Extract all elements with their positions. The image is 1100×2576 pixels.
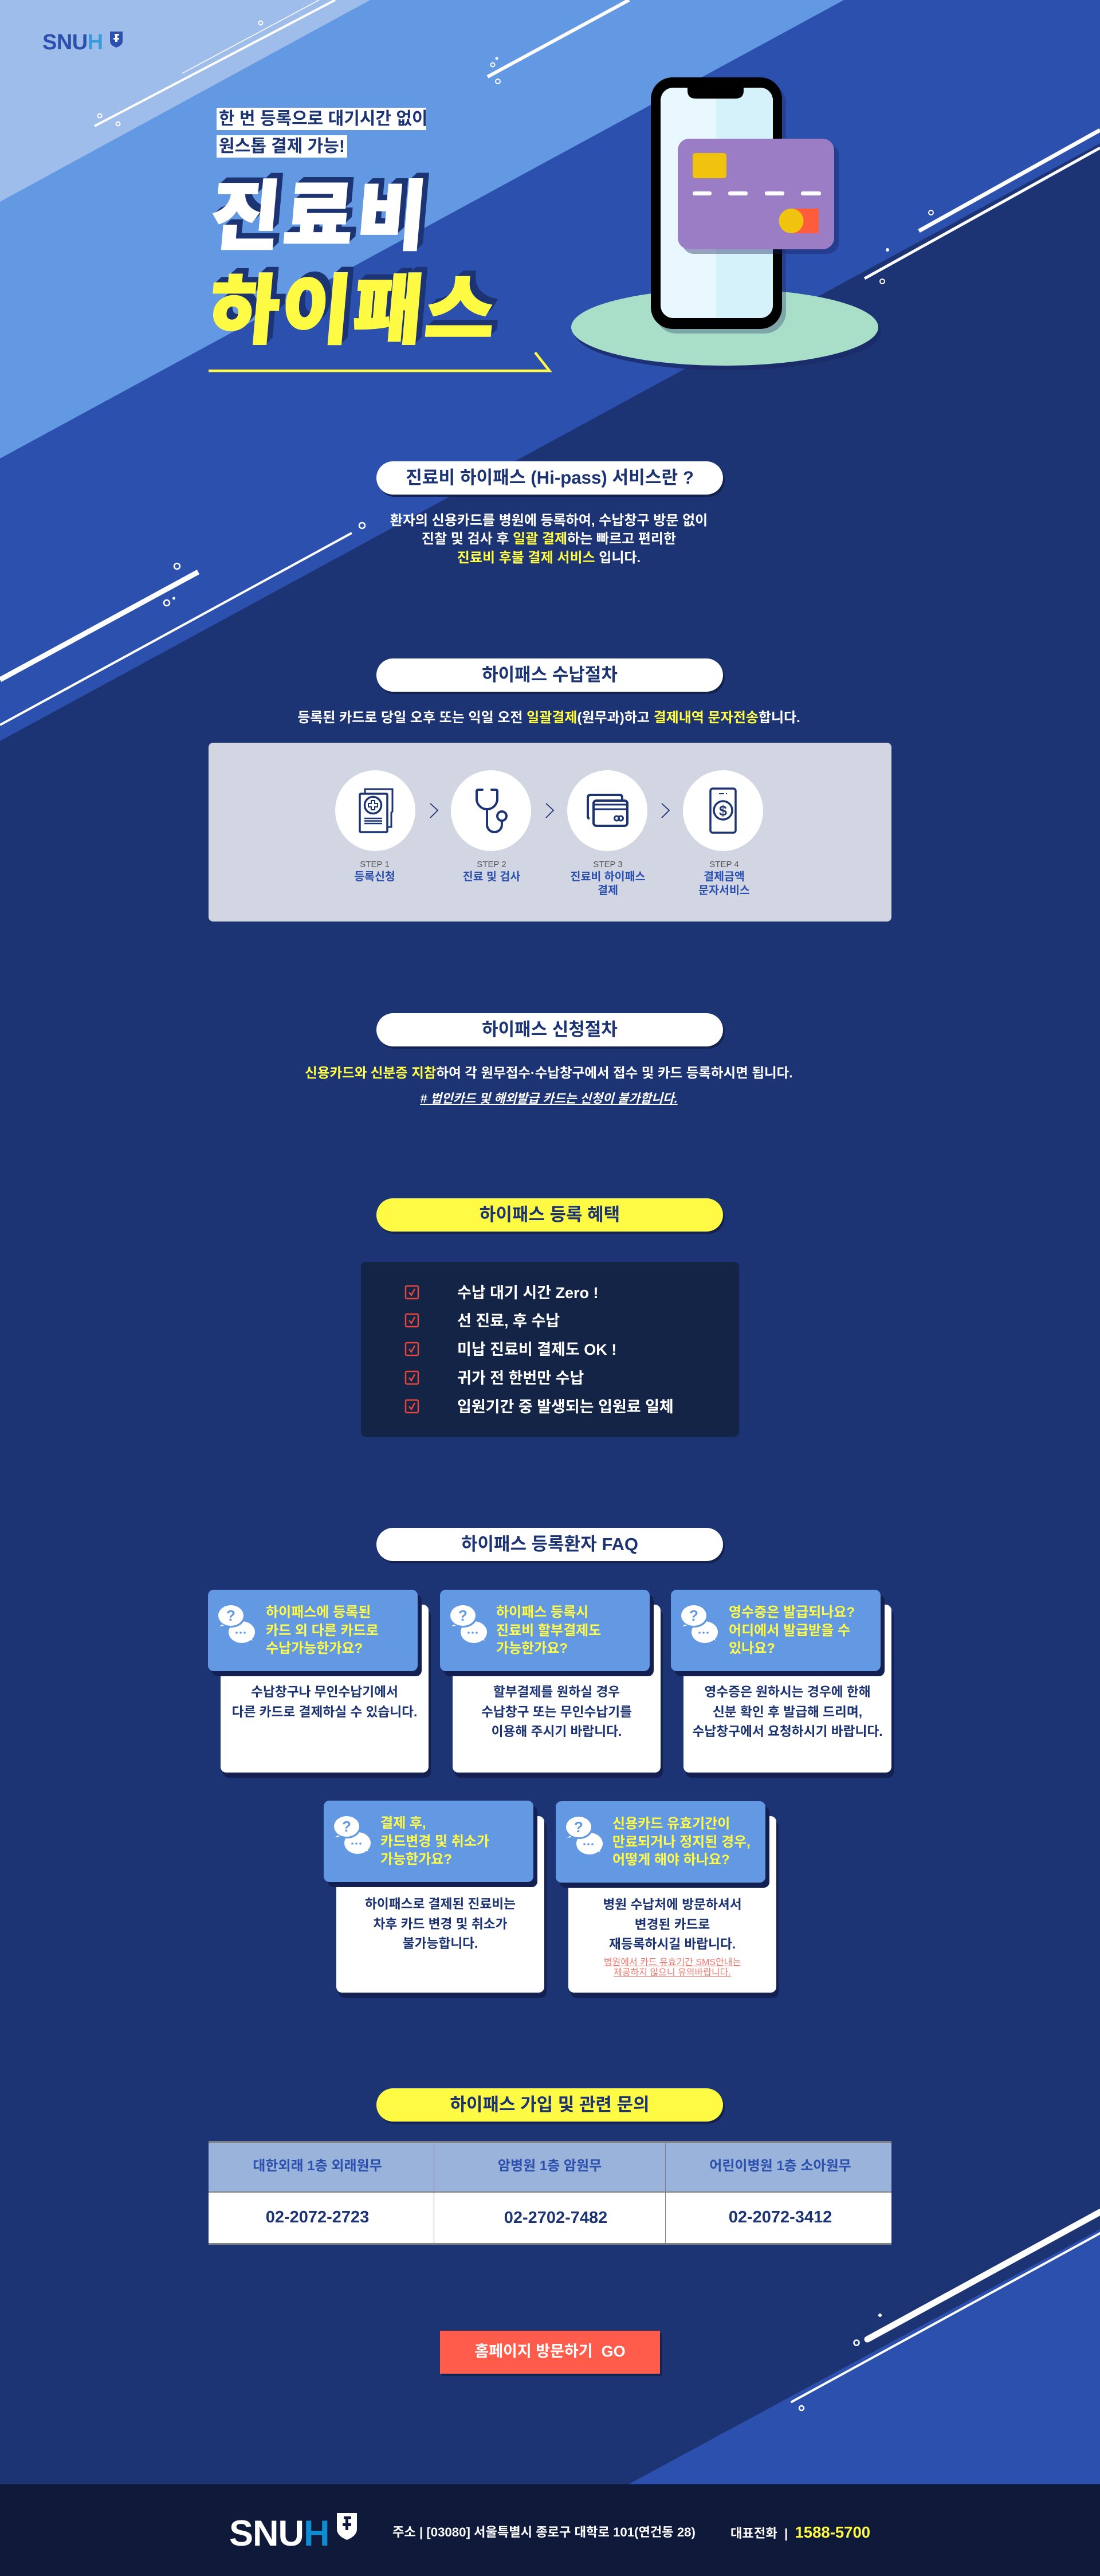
FAQ card 5: 재등록하시길 바랍니다. <box>609 1936 736 1951</box>
icon: speech bubbles <box>681 1605 718 1643</box>
heading: what is hi-pass <box>376 461 723 495</box>
FAQ card 1 <box>208 1590 431 1778</box>
benefit checkboxes <box>404 1285 419 1413</box>
heading: what is hi-pass: 진료비 하이패스 (Hi-pass) 서비스란 ? <box>406 468 694 488</box>
icon: speech bubbles <box>566 1817 603 1854</box>
red note: 병원에서 카드 유효기간 SMS안내는 <box>604 1958 741 1967</box>
benefit 4: 귀가 전 한번만 수납 <box>457 1370 584 1387</box>
FAQ card 2: 진료비 할부결제도 <box>496 1623 601 1638</box>
text: service description: 진료비 후불 결제 서비스 입니다. <box>457 550 641 566</box>
footer <box>0 2484 1100 2576</box>
icon: medical document <box>360 789 392 832</box>
heading: FAQ <box>376 1528 723 1561</box>
icon: speech bubbles <box>334 1816 371 1854</box>
step 1 label <box>354 860 395 883</box>
platform ellipse <box>571 289 881 370</box>
step 2 label: 진료 및 검사 <box>463 871 520 883</box>
FAQ card 1: 카드 외 다른 카드로 <box>266 1623 379 1638</box>
step 3 label <box>571 860 645 896</box>
panel: benefits <box>361 1262 739 1437</box>
icon: speech bubbles: ? <box>458 1607 467 1624</box>
FAQ card 5: 변경된 카드로 <box>635 1916 710 1931</box>
heading: payment procedure <box>376 658 723 692</box>
FAQ card 5: 병원 수납처에 방문하셔서 <box>603 1897 742 1912</box>
FAQ card 4: 결제 후, <box>380 1816 426 1831</box>
heading: FAQ: 하이패스 등록환자 FAQ <box>461 1534 638 1554</box>
FAQ card 2 <box>440 1590 663 1778</box>
benefit 5: 입원기간 중 발생되는 입원료 일체 <box>457 1398 674 1416</box>
text: application description: 신용카드와 신분증 지참하여 각 원무접수·수납창구에서 접수 및 카드 등록하시면 됩니다. <box>305 1065 793 1080</box>
table: contact numbers: 어린이병원 1층 소아원무 <box>709 2158 851 2174</box>
icon: speech bubbles: ? <box>574 1818 583 1836</box>
icon: stethoscope <box>477 790 506 832</box>
step 3 label: 결제 <box>598 884 618 896</box>
header cells: 대한외래 1층 외래원무 <box>253 2158 382 2174</box>
heading: benefits <box>376 1198 723 1232</box>
heading: inquiry: 하이패스 가입 및 관련 문의 <box>450 2095 650 2115</box>
FAQ card 3: 영수증은 발급되나요? <box>729 1605 855 1620</box>
red note <box>604 1958 741 1978</box>
step 1 label: STEP 1 <box>360 860 390 869</box>
FAQ card 1: 수납창구나 무인수납기에서 <box>251 1684 398 1699</box>
text: service description <box>390 513 708 566</box>
red note: 제공하지 않으니 유의바랍니다. <box>614 1968 731 1978</box>
icon: speech bubbles: ? <box>342 1818 351 1835</box>
icon: credit cards <box>588 795 627 826</box>
step 2 label: STEP 2 <box>477 860 506 869</box>
panel: payment steps <box>209 743 891 922</box>
hero subtitle: 한 번 등록으로 대기시간 없이 <box>219 109 428 128</box>
FAQ card 5: 신용카드 유효기간이 <box>612 1816 730 1832</box>
FAQ card 2: 수납창구 또는 무인수납기를 <box>481 1704 632 1719</box>
icon: speech bubbles <box>218 1605 255 1643</box>
heading: inquiry <box>376 2088 723 2122</box>
phone <box>651 77 786 334</box>
FAQ card 3: 수납창구에서 요청하시기 바랍니다. <box>692 1724 882 1739</box>
table: contact numbers: 암병원 1층 암원무 <box>498 2158 602 2174</box>
hero subtitle <box>217 108 428 158</box>
hero title: 하이패스 <box>206 269 501 353</box>
icon: speech bubbles: ? <box>226 1607 235 1624</box>
credit card <box>678 139 839 254</box>
FAQ card 4: 가능한가요? <box>380 1852 452 1867</box>
footer logo: SNUH <box>229 2514 329 2554</box>
FAQ card 3: 어디에서 발급받을 수 <box>729 1623 850 1638</box>
step 1 label: 등록신청 <box>354 871 395 883</box>
icon: phone with dollar: $ <box>719 803 727 819</box>
FAQ card 1: 수납가능한가요? <box>266 1641 363 1656</box>
icon: speech bubbles: ? <box>689 1607 698 1624</box>
icons and chevrons for steps <box>359 787 737 834</box>
step 4 label: 문자서비스 <box>698 884 750 896</box>
step circles and icons <box>335 770 763 851</box>
FAQ card 1: 하이패스에 등록된 <box>266 1605 371 1620</box>
benefit 3: 미납 진료비 결제도 OK ! <box>457 1341 616 1358</box>
hero subtitle: 원스톱 결제 가능! <box>219 137 345 156</box>
hero title: 진료비 <box>207 175 434 259</box>
footer address: 주소 | [03080] 서울특별시 종로구 대학로 101(연건동 28) <box>392 2525 696 2539</box>
step 3 label: 진료비 하이패스 <box>571 871 645 883</box>
button: homepage <box>440 2331 660 2374</box>
phone number cells: 02-2072-2723 <box>266 2208 369 2226</box>
heading: benefits: 하이패스 등록 혜택 <box>480 1205 620 1225</box>
FAQ card 2: 가능한가요? <box>496 1641 568 1656</box>
heading: application procedure <box>376 1013 723 1046</box>
text: payment procedure description: 등록된 카드로 당일 오후 또는 익일 오전 일괄결제(원무과)하고 결제내역 문자전송합니다. <box>297 710 800 726</box>
FAQ card 3 <box>671 1590 894 1778</box>
heading: payment procedure: 하이패스 수납절차 <box>482 665 618 685</box>
arrows between steps <box>430 803 669 818</box>
FAQ card 5 <box>556 1801 779 1998</box>
hero title <box>206 173 501 353</box>
FAQ card 2: 이용해 주시기 바랍니다. <box>492 1724 622 1739</box>
step 4 label <box>698 860 750 896</box>
hero illustration: phone and credit card <box>571 77 881 370</box>
benefit 2: 선 진료, 후 수납 <box>457 1312 560 1330</box>
FAQ card 4: 불가능합니다. <box>403 1936 478 1951</box>
FAQ card 3: 영수증은 원하시는 경우에 한해 <box>704 1684 871 1699</box>
table: contact numbers: 02-2072-3412 <box>729 2208 832 2226</box>
step 4 label: 결제금액 <box>704 871 745 883</box>
text: application note: # 법인카드 및 해외발급 카드는 신청이 불가합니다. <box>420 1092 678 1105</box>
FAQ card 4: 카드변경 및 취소가 <box>380 1834 489 1849</box>
FAQ card 2: 할부결제를 원하실 경우 <box>493 1684 620 1699</box>
FAQ card 4 <box>324 1801 547 1998</box>
FAQ card 2: 하이패스 등록시 <box>496 1605 588 1620</box>
benefit 1: 수납 대기 시간 Zero ! <box>457 1284 599 1301</box>
hero underline arrow <box>209 352 552 373</box>
step 3 label: STEP 3 <box>593 860 623 869</box>
FAQ card 4: 하이패스로 결제된 진료비는 <box>365 1896 516 1911</box>
FAQ card 4: 차후 카드 변경 및 취소가 <box>374 1916 507 1931</box>
table: contact numbers <box>209 2141 891 2245</box>
step 2 label <box>463 860 520 883</box>
table: contact numbers: 02-2702-7482 <box>504 2209 607 2227</box>
step 4 label: STEP 4 <box>709 860 739 869</box>
button: homepage: 홈페이지 방문하기 GO <box>474 2343 626 2360</box>
FAQ card 5: 어떻게 해야 하나요? <box>612 1852 730 1868</box>
icon: speech bubbles <box>450 1605 487 1643</box>
FAQ card 5: 만료되거나 정지된 경우, <box>612 1834 751 1850</box>
FAQ card 3: 신분 확인 후 발급해 드리며, <box>713 1704 862 1719</box>
icon: phone with dollar <box>710 789 736 833</box>
FAQ card 3: 있나요? <box>729 1641 775 1656</box>
FAQ card 1: 다른 카드로 결제하실 수 있습니다. <box>232 1704 417 1719</box>
heading: application procedure: 하이패스 신청절차 <box>482 1020 618 1040</box>
logo: SNUH top: SNUH <box>42 30 103 54</box>
text: service description: 진찰 및 검사 후 일괄 결제하는 빠르고 편리한 <box>422 531 676 547</box>
footer phone: 대표전화 | 1588-5700 <box>730 2523 870 2541</box>
text: service description: 환자의 신용카드를 병원에 등록하여, 수납창구 방문 없이 <box>390 513 708 528</box>
